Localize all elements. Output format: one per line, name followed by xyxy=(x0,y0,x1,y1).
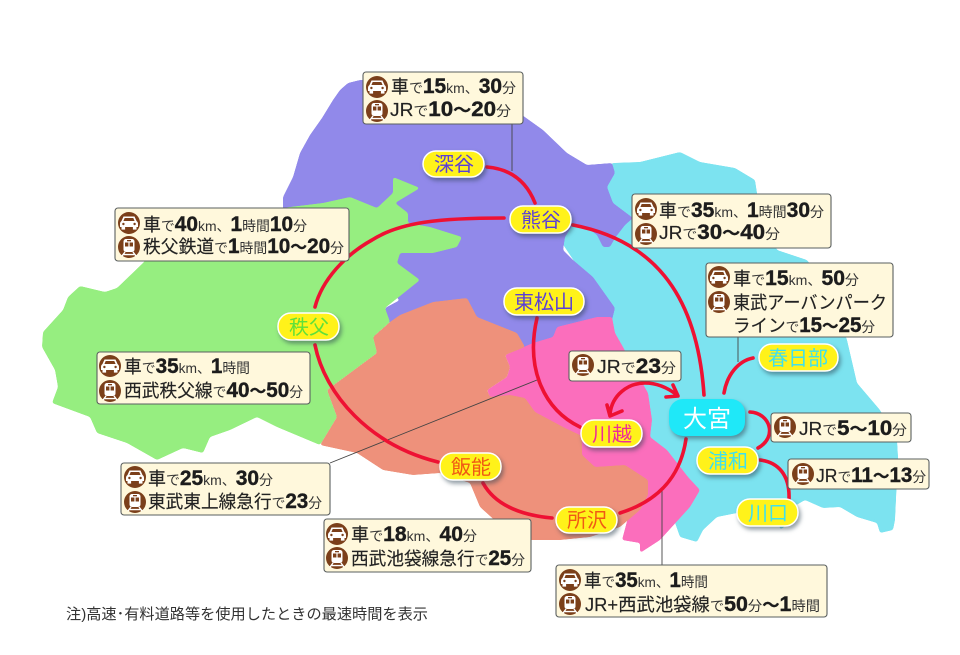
callout: 所沢: JR+西武池袋線で50分～1時間 xyxy=(585,593,820,616)
callout: 春日部: 東武アーバンパーク xyxy=(733,293,887,313)
station label: 浦和 xyxy=(697,447,758,474)
station label: 大宮: 大宮 xyxy=(683,406,731,433)
callout: 深谷: JRで10～20分 xyxy=(390,98,511,121)
region: south (pink) xyxy=(487,317,700,553)
station label: 所沢: 所沢 xyxy=(567,509,607,532)
station label: 深谷: 深谷 xyxy=(434,153,474,176)
callout: 川越 xyxy=(569,351,681,381)
callout: 川口 xyxy=(788,459,929,489)
callout: 春日部: ラインで15～25分 xyxy=(733,314,875,337)
station label: 熊谷 xyxy=(510,206,571,233)
station label: 春日部: 春日部 xyxy=(768,347,828,370)
station label: 浦和: 浦和 xyxy=(708,450,748,473)
map: Saitama regions xyxy=(42,80,898,553)
callout: 川口: JRで11～13分 xyxy=(816,464,926,487)
callout: 春日部 xyxy=(706,263,893,337)
arrow: Omiya to Kawagoe both ways xyxy=(607,383,678,416)
station label: 大宮 xyxy=(669,399,745,436)
station label: 東松山: 東松山 xyxy=(514,291,574,314)
route lines xyxy=(315,167,789,518)
station label: 深谷 xyxy=(423,151,484,177)
callout: 春日部: 車で15km、50分 xyxy=(733,267,859,290)
region: west (green) xyxy=(42,177,462,460)
callout: 秩父 (西武) xyxy=(97,352,310,404)
station label: 川口: 川口 xyxy=(748,503,788,525)
callout: 秩父 (西武): 車で35km、1時間 xyxy=(124,355,250,378)
callout: 所沢: 車で35km、1時間 xyxy=(584,569,708,592)
callout: 浦和 xyxy=(771,413,911,442)
station label: 飯能: 飯能 xyxy=(451,456,491,479)
callout: 川越: JRで23分 xyxy=(597,355,676,378)
leader lines xyxy=(330,124,738,565)
region: north (purple) xyxy=(283,80,633,350)
callout: 秩父 (鉄道): 秩父鉄道で1時間10～20分 xyxy=(143,235,344,258)
callout: 深谷: 車で15km、30分 xyxy=(391,75,516,98)
station label: 川越 xyxy=(581,420,642,447)
callout: 秩父 (西武): 西武秩父線で40～50分 xyxy=(124,379,303,402)
callout: 熊谷 xyxy=(632,194,831,248)
callout: 熊谷: 車で35km、1時間30分 xyxy=(659,199,824,222)
callout: 秩父 (鉄道) xyxy=(115,208,349,261)
callout: 所沢 xyxy=(556,565,827,617)
station label: 川口 xyxy=(737,499,798,526)
callout: 熊谷: JRで30～40分 xyxy=(659,221,780,244)
station label: 秩父: 秩父 xyxy=(289,316,329,339)
callout: 秩父 (鉄道): 車で40km、1時間10分 xyxy=(143,213,307,236)
station label: 熊谷: 熊谷 xyxy=(521,209,561,232)
region: southwest (orange) xyxy=(320,298,648,540)
station label: 川越: 川越 xyxy=(592,423,632,446)
callout: 飯能: 車で18km、40分 xyxy=(351,523,477,546)
callout: 東松山: 東武東上線急行で23分 xyxy=(148,490,322,513)
callout: 浦和: JRで5～10分 xyxy=(799,417,907,440)
station label: 東松山 xyxy=(504,288,584,315)
callout: 飯能 xyxy=(324,519,531,572)
footnote: 注)高速･有料道路等を使用したときの最速時間を表示 xyxy=(66,605,428,623)
station label: 春日部 xyxy=(759,344,838,371)
station label: 秩父 xyxy=(278,313,339,340)
callout: 東松山: 車で25km、30分 xyxy=(148,467,273,490)
callout: 東松山 xyxy=(121,463,330,515)
callout: 飯能: 西武池袋線急行で25分 xyxy=(351,547,525,570)
station label: 飯能 xyxy=(440,453,501,480)
region: east (cyan) xyxy=(560,152,898,542)
station label: 所沢 xyxy=(556,507,617,533)
callout: 深谷 xyxy=(363,72,523,124)
